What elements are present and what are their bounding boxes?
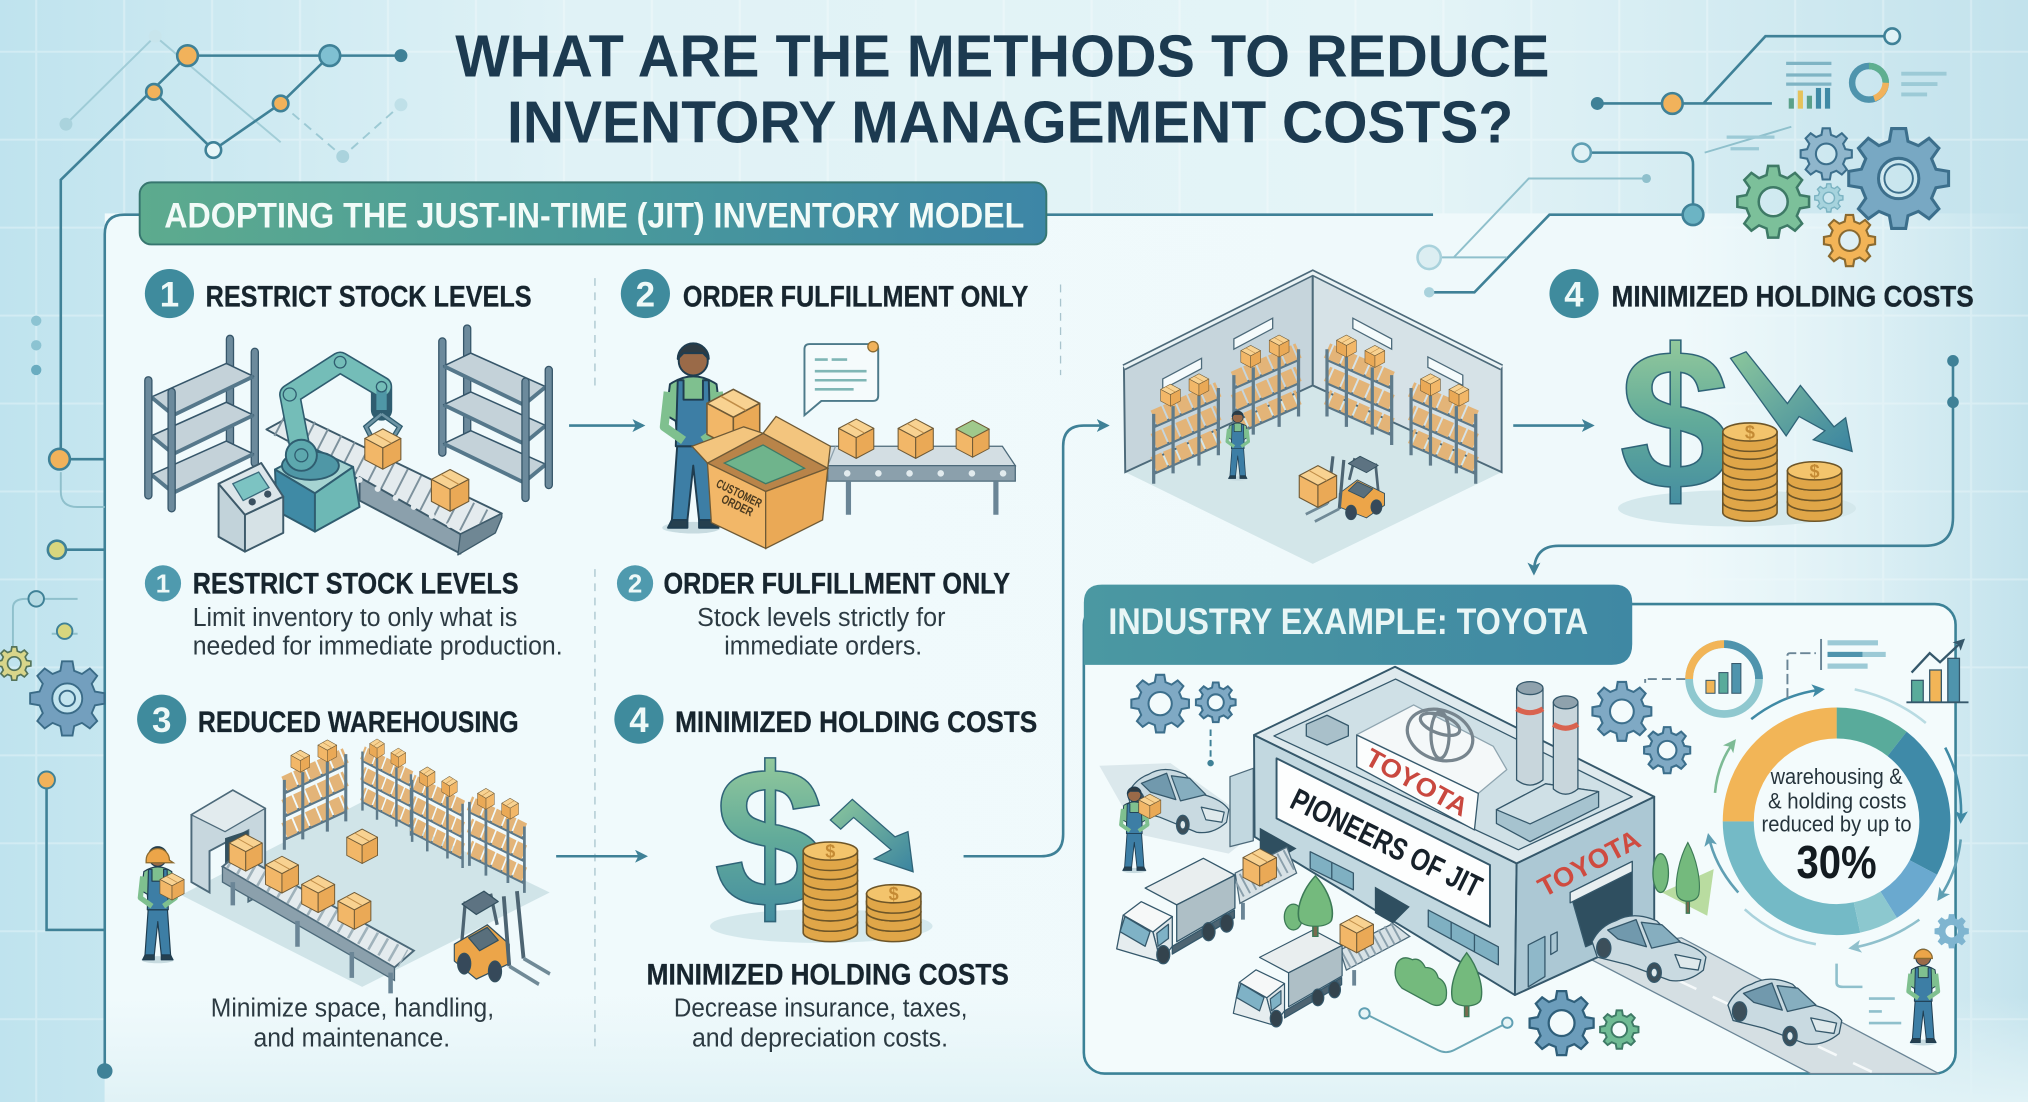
illustration: dollar and coins (bottom): $ bbox=[889, 884, 899, 904]
donut label: warehousing and holding costs reduced: warehousing & bbox=[1770, 764, 1903, 789]
donut label: warehousing and holding costs reduced: 30% bbox=[1796, 836, 1877, 888]
illustration: cars bbox=[1128, 770, 1842, 1046]
panel: adopting JIT model background bbox=[105, 213, 2028, 1102]
block: minimized holding costs text: MINIMIZED HOLDING COSTS bbox=[647, 958, 1009, 991]
section header bbox=[140, 182, 1046, 244]
title: WHAT ARE THE METHODS TO REDUCE bbox=[455, 22, 1549, 89]
step 2 heading: ORDER FULFILLMENT ONLY bbox=[683, 281, 1028, 314]
step 1 heading bbox=[145, 269, 532, 318]
block: order fulfillment only bbox=[617, 565, 1010, 660]
illustration: dollar and coins (bottom) bbox=[710, 727, 933, 950]
panel heading: Toyota: INDUSTRY EXAMPLE: TOYOTA bbox=[1108, 600, 1588, 642]
donut circular arrows bbox=[1709, 689, 1961, 948]
step 2 heading bbox=[621, 269, 1028, 318]
illustration: road bbox=[1577, 938, 1939, 1074]
arrow: warehouse flow up bbox=[964, 426, 1107, 856]
block: reduced warehousing text: and maintenance. bbox=[254, 1024, 450, 1052]
illustration: dollar and coins (top): $ bbox=[1810, 461, 1820, 481]
illustration: dollar and coins (top): $ bbox=[1745, 422, 1755, 442]
block: restrict stock levels: 1 bbox=[156, 570, 170, 598]
donut label: warehousing and holding costs reduced bbox=[1762, 764, 1912, 888]
block: minimized holding costs text: and depreciation costs. bbox=[692, 1024, 948, 1052]
title bbox=[455, 22, 1549, 155]
chart: list lines bbox=[1787, 639, 1886, 698]
block: reduced warehousing text: Minimize space, handling, bbox=[211, 995, 494, 1023]
icon: small dashboard charts top right bbox=[1727, 63, 1947, 149]
block: restrict stock levels: Limit inventory to only what is bbox=[193, 604, 517, 632]
step 4 heading: 4 bbox=[629, 701, 649, 740]
block: minimized holding costs text bbox=[647, 958, 1009, 1052]
step 1 heading: RESTRICT STOCK LEVELS bbox=[206, 281, 532, 314]
step 2 heading: 2 bbox=[636, 276, 655, 315]
section header: ADOPTING THE JUST-IN-TIME (JIT) INVENTORY MODEL bbox=[164, 197, 1024, 236]
illustration: worker packing customer order bbox=[662, 341, 1015, 548]
step 3 heading: REDUCED WAREHOUSING bbox=[198, 706, 519, 739]
step 1 heading: 1 bbox=[160, 276, 179, 315]
step 4 heading right: 4 bbox=[1564, 276, 1584, 315]
illustration: robot arm and empty racks bbox=[148, 329, 549, 555]
block: minimized holding costs text: Decrease insurance, taxes, bbox=[674, 995, 967, 1023]
title: INVENTORY MANAGEMENT COSTS? bbox=[507, 88, 1513, 155]
block: order fulfillment only: immediate orders. bbox=[724, 632, 922, 660]
illustration: reduced warehousing bbox=[140, 739, 550, 993]
step 4 heading: MINIMIZED HOLDING COSTS bbox=[675, 706, 1037, 739]
block: restrict stock levels: RESTRICT STOCK LEVELS bbox=[193, 568, 519, 601]
illustration: conveyors, trucks and boxes bbox=[1117, 847, 1410, 1027]
illustration: trees bbox=[1284, 843, 1714, 1017]
step 4 heading bbox=[614, 695, 1037, 744]
illustration: dollar and coins (bottom): $ bbox=[825, 842, 835, 862]
illustration: warehouse bbox=[1124, 273, 1502, 564]
illustration: gears Toyota panel bbox=[1131, 675, 1968, 1055]
icon: gears top right bbox=[1737, 128, 1949, 266]
decorative network top right bbox=[1418, 28, 1900, 297]
illustration: dollar and coins (top): $ bbox=[1619, 309, 1731, 532]
decorative network top left bbox=[59, 30, 407, 459]
illustration: dollar and coins (bottom): $ bbox=[714, 727, 825, 950]
illustration: worker packing customer order: CUSTOMER bbox=[714, 476, 764, 511]
illustration: Toyota factory: PIONEERS OF JIT bbox=[1285, 782, 1488, 905]
step 4 heading right: MINIMIZED HOLDING COSTS bbox=[1612, 281, 1974, 314]
dividers bbox=[595, 278, 1061, 1048]
arrow 1 bbox=[569, 425, 643, 427]
donut label: warehousing and holding costs reduced: reduced by up to bbox=[1762, 812, 1912, 837]
decorative network left side bbox=[0, 316, 113, 1079]
illustration: worker packing customer order: ORDER bbox=[719, 492, 756, 519]
chart: mini donut with bars bbox=[1645, 644, 1759, 714]
block: order fulfillment only: ORDER FULFILLMENT ONLY bbox=[663, 568, 1010, 601]
illustration: dollar and coins (top) bbox=[1618, 309, 1856, 532]
illustration: Toyota factory: TOYOTA bbox=[1533, 823, 1645, 903]
chart: 30 percent donut bbox=[1699, 683, 1975, 959]
block: restrict stock levels bbox=[145, 565, 563, 660]
arrow: down to Toyota bbox=[1534, 355, 1959, 573]
illustration: workers bbox=[1121, 787, 1938, 1045]
panel: industry example Toyota bbox=[1084, 604, 1956, 1074]
block: order fulfillment only: Stock levels strictly for bbox=[697, 604, 946, 632]
arrow 2 bbox=[556, 855, 645, 857]
illustration: Toyota factory bbox=[1099, 667, 1654, 995]
arrow 3 bbox=[1513, 425, 1592, 427]
step 3 heading: 3 bbox=[152, 701, 171, 740]
chart: bars with rising arrow bbox=[1906, 640, 1969, 702]
panel heading: Toyota bbox=[1084, 585, 1632, 665]
donut label: warehousing and holding costs reduced: & holding costs bbox=[1768, 788, 1906, 813]
block: order fulfillment only: 2 bbox=[628, 570, 642, 598]
step 3 heading bbox=[137, 695, 519, 744]
illustration: Toyota factory: TOYOTA bbox=[1360, 744, 1473, 822]
step 4 heading right bbox=[1549, 269, 1974, 318]
block: restrict stock levels: needed for immediate production. bbox=[193, 632, 563, 660]
block: reduced warehousing text bbox=[211, 995, 494, 1052]
